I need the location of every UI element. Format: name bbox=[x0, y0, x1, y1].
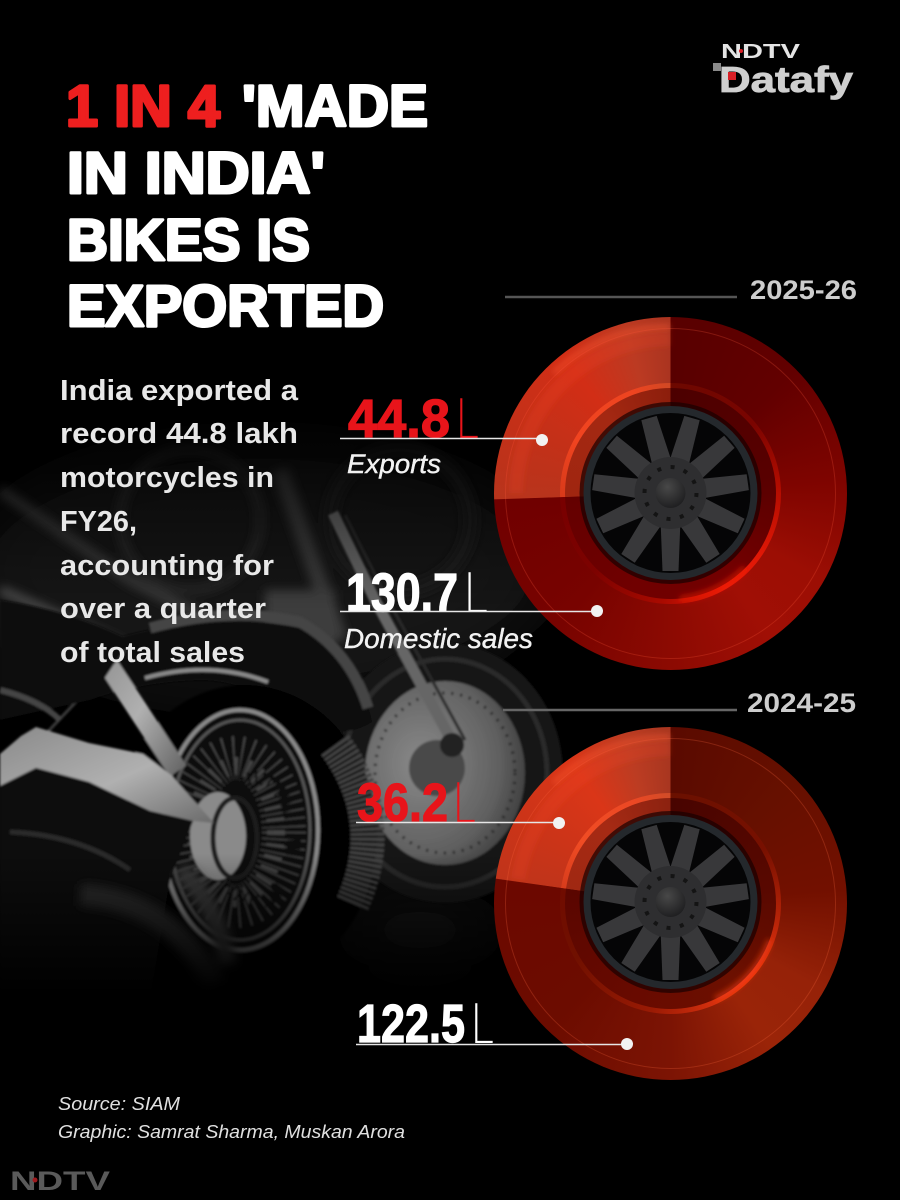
year label: 2025-26: 2025-26 bbox=[750, 275, 857, 305]
source and credits bbox=[58, 1094, 405, 1142]
fender arch bbox=[90, 621, 372, 732]
lit foreground tyre bbox=[10, 832, 130, 870]
alloy wheel and tyre grooves bbox=[505, 322, 836, 659]
title: BIKES IS bbox=[67, 208, 310, 273]
logo: NDTV Datafy: NDTV bbox=[721, 41, 801, 63]
summary paragraph: record 44.8 lakh bbox=[60, 418, 298, 450]
summary paragraph: of total sales bbox=[60, 637, 245, 669]
rear wheel bbox=[327, 643, 563, 903]
callout: exports 2025-26 bbox=[340, 388, 548, 479]
callout: domestic sales 2025-26: 130.7 bbox=[346, 563, 458, 623]
tyre share ring bbox=[494, 727, 847, 1080]
title bbox=[66, 74, 428, 339]
summary paragraph bbox=[60, 375, 299, 669]
summary paragraph: over a quarter bbox=[60, 593, 266, 625]
source and credits: Source: SIAM bbox=[58, 1094, 180, 1114]
tyre share ring bbox=[494, 317, 847, 670]
summary paragraph: accounting for bbox=[60, 550, 274, 582]
callout: exports 2025-26: Exports bbox=[347, 449, 441, 479]
year label: 2024-25: 2024-25 bbox=[747, 688, 856, 718]
callout: exports 2024-25: 36.2 bbox=[357, 773, 448, 833]
callout: domestic sales 2024-25 bbox=[356, 993, 633, 1056]
callout: exports 2025-26: 44.8 bbox=[348, 389, 450, 449]
wheel chart: 2025-26, exports 44.8L vs domestic 130.7L bbox=[494, 317, 847, 670]
wire spokes bbox=[188, 758, 284, 906]
inner band bbox=[565, 798, 776, 1009]
rim highlight ring bbox=[560, 383, 781, 604]
callout: exports 2025-26: L bbox=[455, 388, 479, 451]
summary paragraph: motorcycles in bbox=[60, 462, 274, 494]
logo: NDTV Datafy bbox=[713, 41, 853, 100]
callout: domestic sales 2025-26 bbox=[340, 562, 603, 654]
title: 1 IN 4 bbox=[66, 74, 220, 139]
title: 'MADE bbox=[242, 74, 428, 139]
fork bbox=[103, 658, 188, 775]
logo: NDTV Datafy: Datafy bbox=[719, 59, 853, 100]
source and credits: Graphic: Samrat Sharma, Muskan Arora bbox=[58, 1122, 405, 1142]
callout: domestic sales 2025-26: L bbox=[463, 562, 488, 625]
wheel chart: 2024-25, exports 36.2L vs domestic 122.5L bbox=[494, 727, 847, 1080]
footer logo: NDTV: NDTV bbox=[10, 1166, 110, 1196]
callout: domestic sales 2025-26: Domestic sales bbox=[344, 623, 533, 654]
hub bbox=[190, 792, 246, 880]
callout: domestic sales 2024-25: 122.5 bbox=[357, 994, 465, 1054]
front tyre and tread bbox=[122, 684, 376, 954]
title: IN INDIA' bbox=[67, 141, 325, 206]
inner band bbox=[565, 388, 776, 599]
summary paragraph: FY26, bbox=[60, 506, 137, 538]
callout: exports 2024-25: L bbox=[452, 772, 476, 835]
rim highlight ring bbox=[560, 793, 781, 1014]
title: EXPORTED bbox=[67, 274, 384, 339]
background photo: motorcycles bbox=[0, 446, 563, 968]
silver mudguard bbox=[0, 727, 214, 823]
summary paragraph: India exported a bbox=[60, 375, 299, 407]
callout: domestic sales 2024-25: L bbox=[470, 993, 494, 1056]
alloy wheel and tyre grooves bbox=[505, 732, 836, 1069]
callout: exports 2024-25 bbox=[356, 772, 565, 835]
